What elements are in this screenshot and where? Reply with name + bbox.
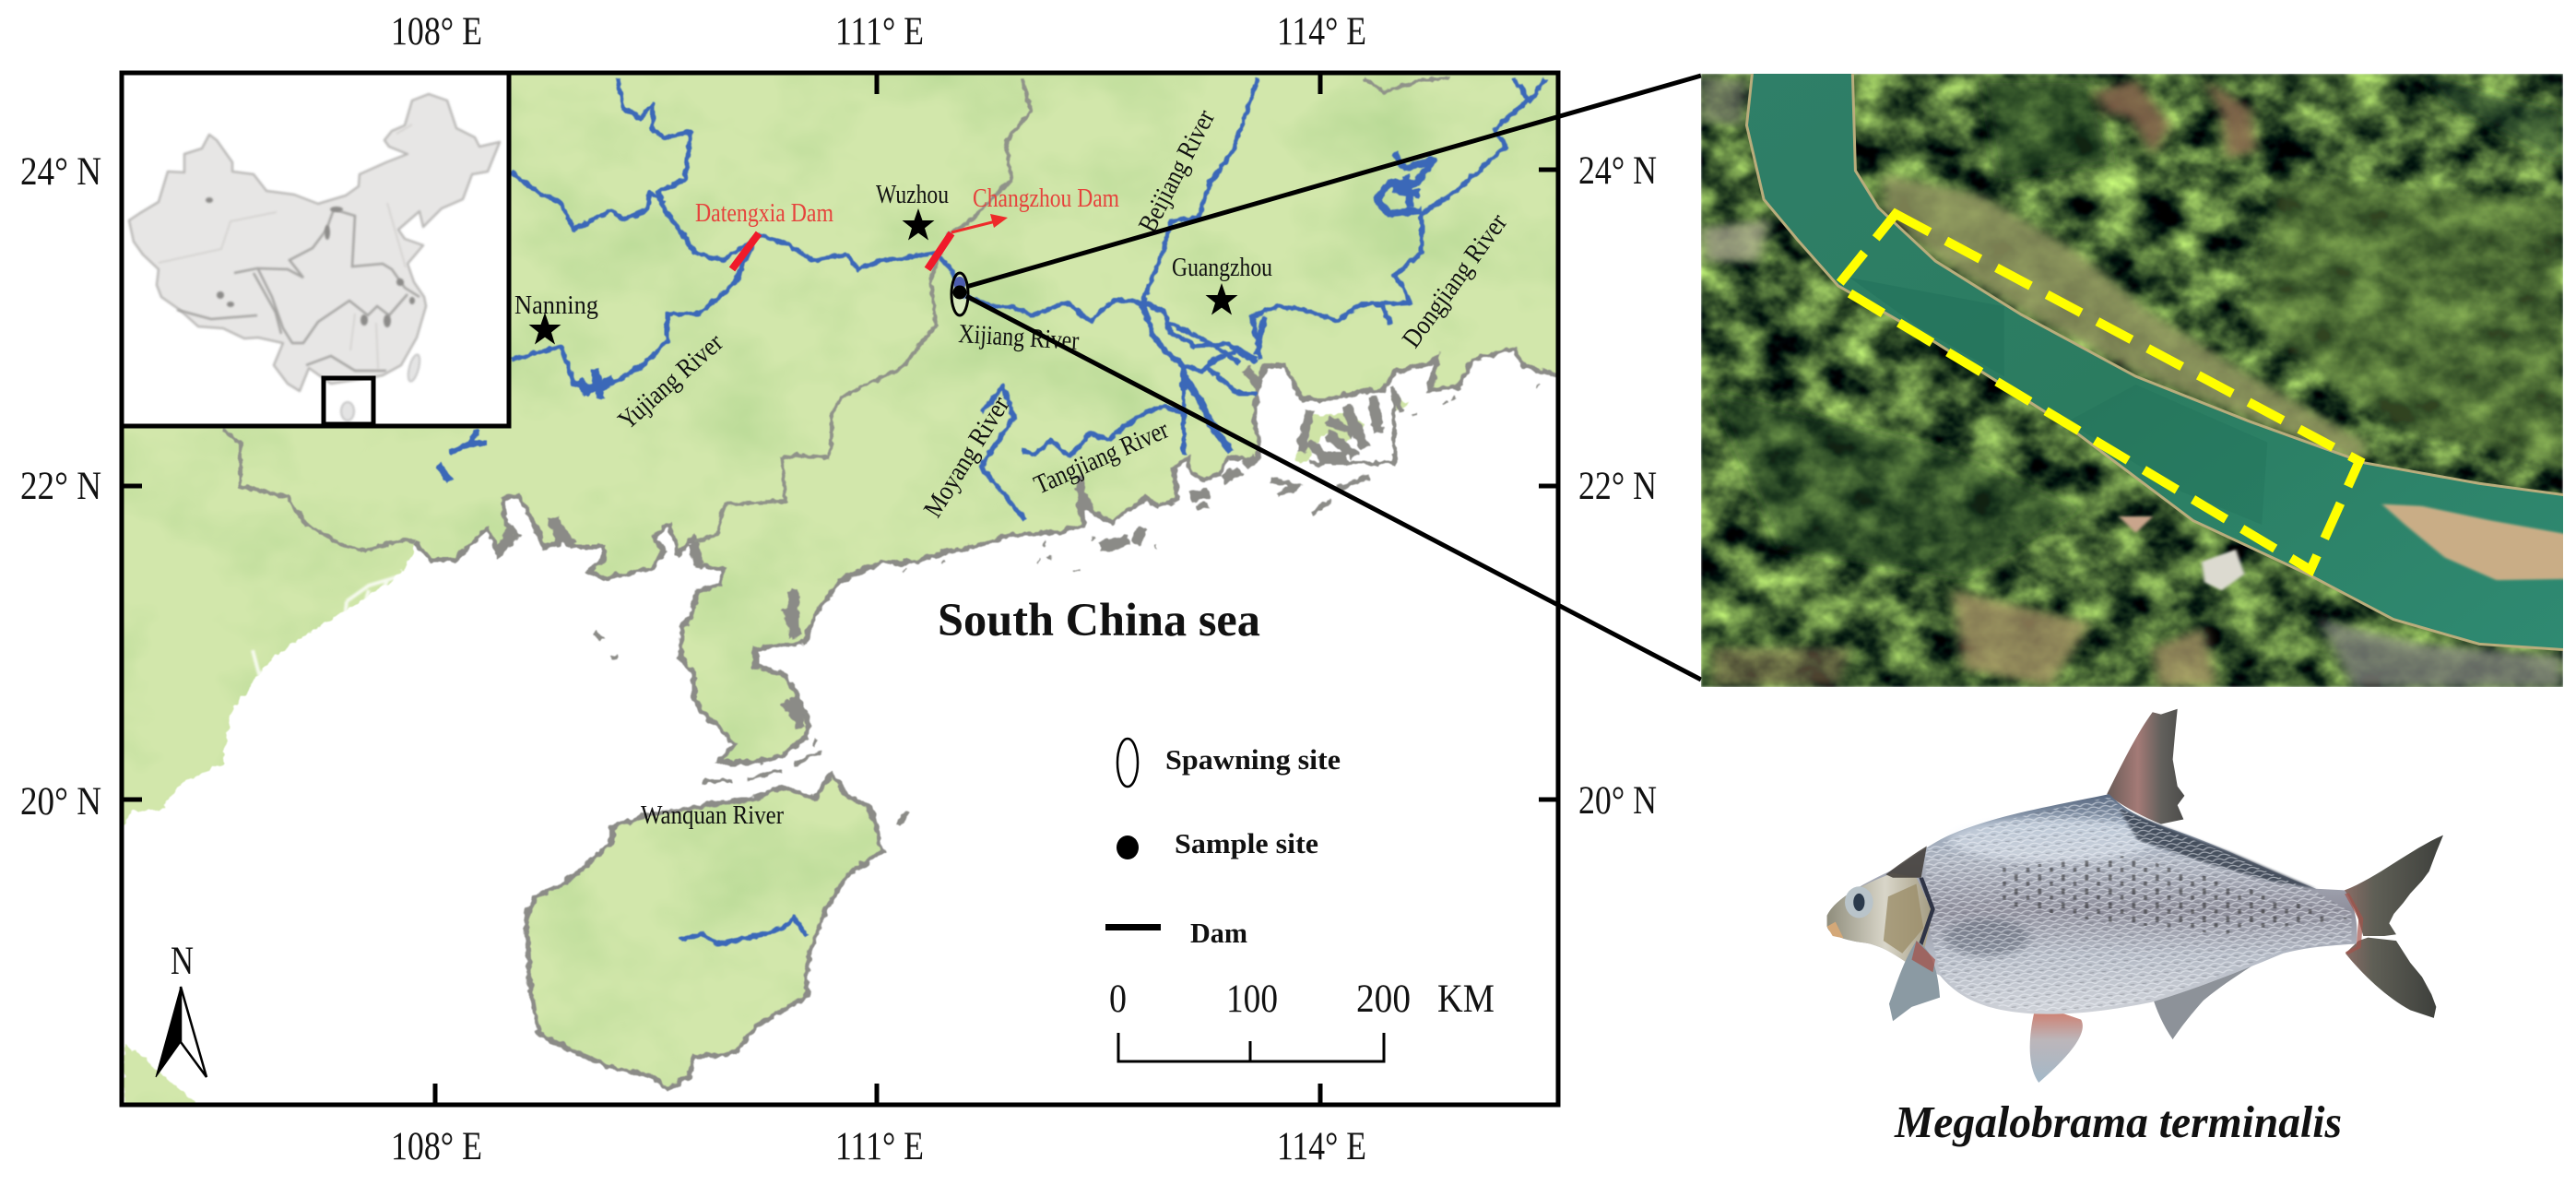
panel: satellite image of spawning ground xyxy=(1701,72,2570,687)
dam: Changzhou (red bar) xyxy=(928,233,951,269)
Yujiang River xyxy=(512,244,752,390)
quarry xyxy=(2202,550,2244,590)
river label: Wanquan River: Wanquan River xyxy=(641,801,785,830)
species caption: Megalobrama terminalis xyxy=(1894,1096,2342,1147)
legend: dam xyxy=(1105,917,1247,949)
upper tributary xyxy=(512,172,665,230)
arrow: Changzhou Dam pointer xyxy=(951,214,1008,232)
China outline xyxy=(129,94,500,391)
Tangjiang River xyxy=(1022,406,1184,456)
land-use patches, river and sandbar xyxy=(1701,72,2570,687)
axis labels: longitude and latitude: 111° E xyxy=(835,1125,924,1168)
Xijiang main stem xyxy=(618,78,1142,321)
icon: north arrow: N xyxy=(171,940,194,983)
coastline xyxy=(415,349,1558,1089)
scale bar: 100 xyxy=(1226,978,1278,1021)
axis labels: longitude and latitude: 22° N xyxy=(20,465,101,508)
Beijiang River xyxy=(1142,78,1258,302)
scale bar: 200 xyxy=(1356,978,1411,1021)
legend: spawning site: Spawning site xyxy=(1165,743,1341,776)
river label: Tangjiang River: Tangjiang River xyxy=(1030,415,1174,500)
river label: Yujiang River: Yujiang River xyxy=(612,327,729,435)
fish body xyxy=(1827,794,2357,1014)
river label: Beijiang River: Beijiang River xyxy=(1133,105,1221,237)
scale bar: 0 xyxy=(1109,978,1127,1021)
river channel xyxy=(1746,72,2570,650)
upper highlight xyxy=(1949,818,2157,862)
fish illustration xyxy=(1827,709,2443,1083)
western headwaters xyxy=(450,430,488,453)
Hong Kong area green islands xyxy=(1295,397,1410,461)
anal fin xyxy=(2152,947,2284,1039)
axis labels: longitude and latitude: 22° N xyxy=(1578,465,1657,508)
river label: Xijiang River: Xijiang River xyxy=(958,319,1081,356)
pale western settlement xyxy=(1701,220,1769,261)
map frame and ticks xyxy=(122,73,1558,1105)
tan farmland strip xyxy=(1884,174,2365,463)
lower tail lobe xyxy=(2346,938,2436,1018)
river label: Dongjiang River: Dongjiang River xyxy=(1397,208,1513,353)
head xyxy=(1827,873,1932,963)
forest texture xyxy=(1701,74,2563,687)
brown bare slopes xyxy=(2096,80,2170,154)
legend: spawning site xyxy=(1117,739,1341,787)
dam label: Datengxia Dam: Datengxia Dam xyxy=(695,199,833,228)
belly shadow xyxy=(1944,918,2029,956)
tail base blush xyxy=(2346,894,2361,954)
sea label: South China sea xyxy=(938,595,1260,646)
reservoir network xyxy=(1377,153,1434,214)
south-east town xyxy=(2319,620,2562,687)
arrow: connector lines to satellite image xyxy=(966,76,1701,680)
dark back shading xyxy=(2119,809,2316,889)
place name: Guangzhou: Guangzhou xyxy=(1172,253,1272,282)
mid-green hills northeast xyxy=(2251,179,2562,467)
axis labels: longitude and latitude: 20° N xyxy=(1578,779,1657,823)
Dongjiang River xyxy=(1382,78,1529,325)
dark forest north xyxy=(1981,80,2113,179)
southern fields xyxy=(1953,590,2090,685)
inset lakes xyxy=(206,197,415,327)
sea with Hainan island cut out xyxy=(111,349,1567,1116)
icon: star Wuzhou xyxy=(902,208,935,240)
legend: dam: Dam xyxy=(1190,917,1247,949)
provincial borders xyxy=(223,78,1450,551)
scale bar: KM xyxy=(1437,978,1495,1021)
inset background xyxy=(122,73,509,426)
land base xyxy=(122,73,1558,1105)
rivers xyxy=(438,78,1545,944)
legend: sample site: Sample site xyxy=(1175,827,1318,859)
ventral fin xyxy=(2030,1012,2083,1083)
place name: Wuzhou: Wuzhou xyxy=(876,181,949,209)
icon: spawning site marker xyxy=(951,273,968,315)
darker water band xyxy=(1849,278,2004,376)
axis labels: longitude and latitude: 114° E xyxy=(1277,10,1366,53)
Wanquan River xyxy=(680,918,807,944)
dam label: Changzhou Dam: Changzhou Dam xyxy=(973,184,1119,213)
lateral dark spots xyxy=(1996,856,2349,934)
pectoral fin xyxy=(1889,941,1940,1021)
legend: sample site xyxy=(1117,827,1318,859)
axis labels: longitude and latitude xyxy=(20,10,1657,1168)
axis labels: longitude and latitude: 108° E xyxy=(391,10,482,53)
axis labels: longitude and latitude: 24° N xyxy=(1578,149,1657,193)
axis labels: longitude and latitude: 114° E xyxy=(1277,1125,1366,1168)
Moyang River xyxy=(981,386,1025,520)
icon: north arrow xyxy=(156,940,207,1077)
axis labels: longitude and latitude: 108° E xyxy=(391,1125,482,1168)
icon: star Guangzhou xyxy=(1206,283,1237,315)
offshore pale shoals xyxy=(250,574,400,676)
Pearl delta channels xyxy=(1142,302,1184,366)
dorsal fin xyxy=(2107,709,2184,824)
dam: Datengxia (red bar) xyxy=(732,233,759,269)
body scales xyxy=(1926,798,2352,1011)
yellow dashed study-area outline xyxy=(1837,214,2359,570)
panel: China inset xyxy=(122,73,509,426)
icon: star Nanning xyxy=(529,313,561,345)
land relief shading xyxy=(122,73,1558,1105)
axis labels: longitude and latitude: 24° N xyxy=(20,150,101,194)
inset study-area box xyxy=(324,378,373,424)
coastal island clusters xyxy=(498,369,1378,729)
legend xyxy=(1105,739,1341,949)
sandbar xyxy=(2381,504,2570,580)
axis labels: longitude and latitude: 20° N xyxy=(20,780,101,824)
place name: Nanning: Nanning xyxy=(514,290,598,320)
dark forest south xyxy=(1712,393,2078,578)
eye xyxy=(1845,886,1873,918)
scale bar xyxy=(1109,978,1495,1061)
inset rivers xyxy=(159,124,419,371)
river label: Moyang River: Moyang River xyxy=(918,391,1016,523)
map labels xyxy=(514,105,1513,830)
gill cover edge xyxy=(1919,878,1932,950)
upper tail lobe xyxy=(2345,835,2443,936)
inset Hainan and Taiwan xyxy=(341,353,422,421)
axis labels: longitude and latitude: 111° E xyxy=(835,10,924,53)
panel: main map xyxy=(111,73,1567,1116)
